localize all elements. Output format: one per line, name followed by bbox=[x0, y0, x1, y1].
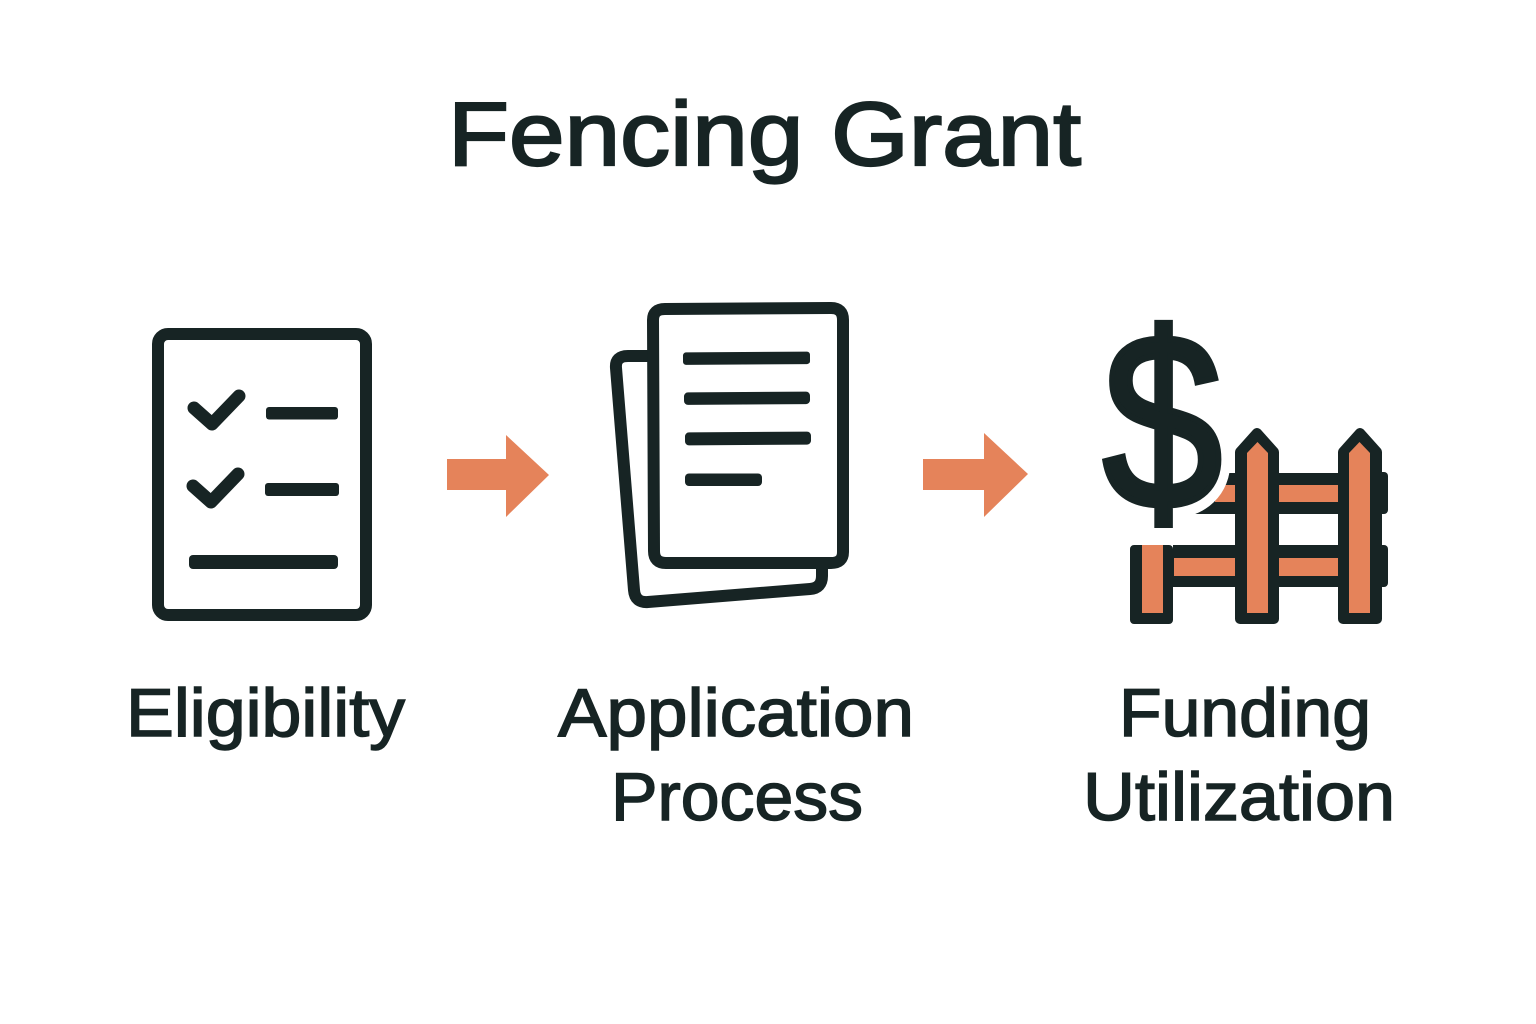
label: application process: Application bbox=[558, 675, 914, 751]
arrow: application to funding bbox=[923, 433, 1028, 517]
label: eligibility: Eligibility bbox=[126, 675, 405, 751]
label: funding utilization: Funding bbox=[1119, 675, 1371, 751]
fence posts bbox=[1134, 433, 1377, 620]
title: Fencing Grant bbox=[448, 85, 1081, 185]
icon: dollar sign and fence bbox=[1103, 283, 1388, 620]
label: funding utilization: Utilization bbox=[1083, 759, 1395, 835]
white halo around dollar sign: $ bbox=[1103, 283, 1222, 561]
icon: application documents bbox=[616, 308, 843, 602]
label: application process bbox=[558, 675, 914, 835]
dollar sign: $ bbox=[1103, 283, 1222, 561]
label: funding utilization bbox=[1083, 675, 1395, 835]
fence rails bbox=[1173, 472, 1388, 587]
label: application process: Process bbox=[611, 759, 863, 835]
arrow: eligibility to application bbox=[447, 435, 549, 517]
icon: eligibility checklist bbox=[158, 334, 366, 615]
